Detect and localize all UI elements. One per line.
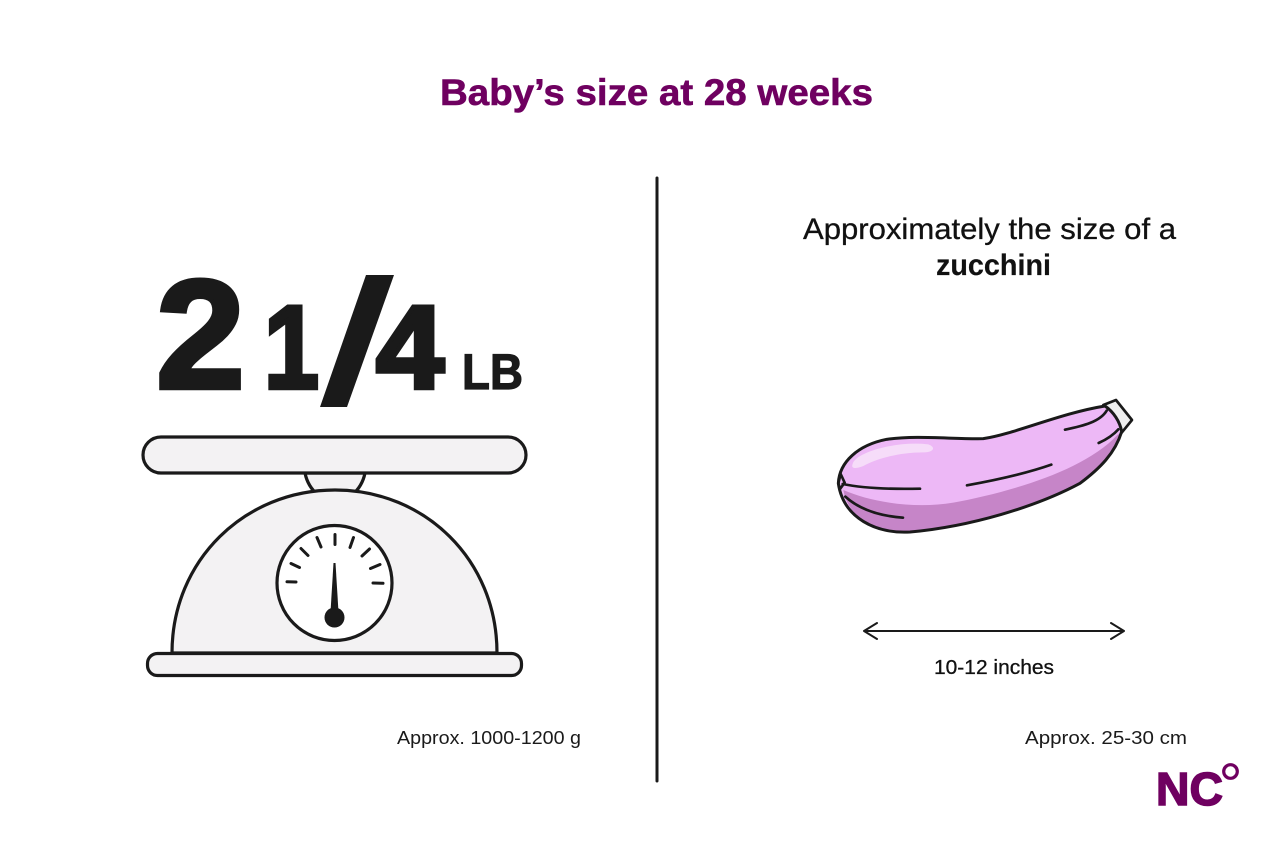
dial ticks (287, 534, 383, 583)
scale dome (172, 490, 497, 653)
scale base (148, 654, 522, 676)
scale tray (143, 437, 526, 473)
zucchini ridges (838, 411, 1118, 518)
comparison text: Approximately the size of a (803, 213, 1176, 246)
weight value: 2 (156, 248, 245, 421)
logo: NC (1156, 763, 1223, 815)
weight in grams: Approx. 1000-1200 g (397, 728, 581, 748)
title: Baby’s size at 28 weeks (440, 72, 873, 113)
divider (656, 178, 658, 781)
zucchini outline (838, 406, 1122, 532)
comparison text (803, 213, 1176, 282)
zucchini body (838, 406, 1122, 532)
icon: kitchen scale (143, 437, 526, 676)
fraction slash (320, 275, 394, 407)
comparison text: zucchini (936, 249, 1051, 282)
dial needle (324, 563, 344, 628)
zucchini highlight (852, 444, 933, 468)
scale dial (277, 526, 392, 640)
zucchini stem (1103, 400, 1132, 433)
weight value (156, 248, 523, 421)
icon: zucchini (838, 400, 1132, 532)
zucchini shadow (843, 432, 1122, 532)
length in inches: 10-12 inches (934, 657, 1054, 679)
weight value: 1 (264, 282, 319, 414)
arrow: length (864, 623, 1124, 639)
weight value: LB (462, 344, 523, 400)
panel: weight (143, 248, 581, 748)
scale neck (305, 473, 365, 495)
panel: length (803, 213, 1187, 748)
length in centimetres: Approx. 25-30 cm (1025, 728, 1187, 748)
weight value: 4 (376, 282, 444, 414)
